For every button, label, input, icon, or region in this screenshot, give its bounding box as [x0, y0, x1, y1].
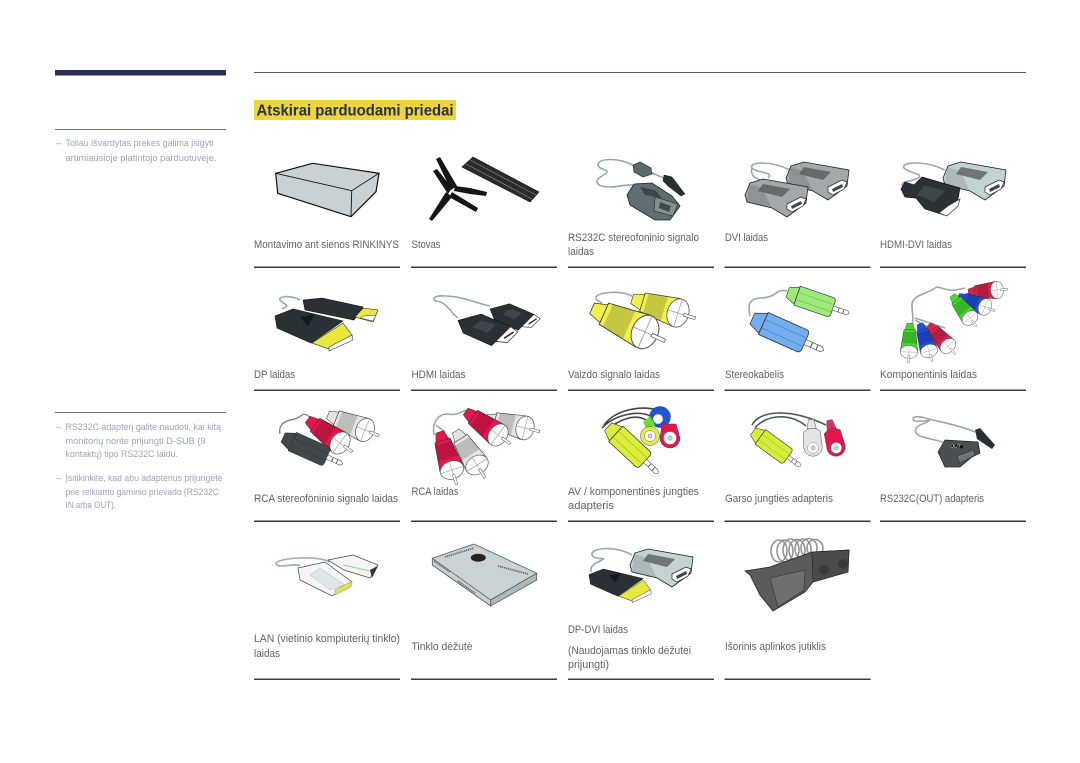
panel: HDMI-DVI cable — [880, 162, 1026, 268]
icon: DP cable connectors — [275, 297, 378, 351]
icon: RCA plugs — [428, 402, 542, 488]
panel: RS232C OUT adapter — [880, 417, 1026, 522]
note: connect adapters to correct port: IN arba OUT). — [66, 500, 116, 511]
label: adapteris — [568, 500, 615, 512]
note: availability at retailers: Toliau išvardytas prekes galima įsigyti — [66, 138, 214, 149]
label: Garso jungties adapteris — [725, 493, 834, 505]
label: (Naudojamas tinklo dėžutei — [568, 645, 691, 657]
label: Vaizdo signalo laidas — [568, 369, 661, 381]
note: availability at retailers — [55, 129, 226, 164]
panel: network box — [411, 544, 557, 680]
note: connect adapters to correct port: prie reikiamo gaminio prievado (RS232C — [66, 487, 219, 498]
label — [254, 633, 400, 660]
icon: wall mount box — [276, 163, 379, 217]
label: laidas — [254, 648, 281, 660]
note: RS232C adapter use: – — [56, 422, 62, 433]
note: RS232C adapter use — [55, 412, 226, 460]
panel: stereo cable — [724, 283, 870, 391]
label: HDMI laidas — [412, 369, 466, 381]
label — [568, 486, 700, 512]
note: connect adapters to correct port: – — [56, 473, 62, 484]
label: Tinklo dėžutė — [412, 641, 472, 653]
panel: DP cable — [254, 297, 400, 391]
icon: stereo jack plugs — [747, 283, 852, 361]
icon: HDMI and DVI connectors — [901, 162, 1006, 216]
label: RCA stereofoninio signalo laidas — [254, 493, 399, 505]
label: Komponentinis laidas — [880, 369, 978, 381]
panel: video signal cable — [568, 285, 714, 391]
icon: AV adapter plugs — [601, 406, 680, 481]
icon: component RCA plugs — [900, 281, 1008, 364]
label — [568, 232, 699, 258]
note: connect adapters to correct port — [56, 473, 222, 511]
label: laidas — [568, 246, 595, 258]
label: HDMI-DVI laidas — [880, 239, 953, 251]
label: Stereokabelis — [725, 369, 785, 381]
icon: RS232C OUT adapter: OUT — [950, 443, 961, 450]
label: DP-DVI laidas — [568, 624, 629, 636]
panel: stand — [411, 157, 557, 268]
panel: wall mount kit — [254, 163, 400, 268]
label: AV / komponentinės jungties — [568, 486, 700, 498]
panel: external ambient sensor — [724, 538, 870, 680]
panel: HDMI cable — [411, 296, 557, 391]
panel: RCA stereo cable — [254, 404, 400, 522]
panel: component cable — [880, 281, 1026, 391]
icon: external sensor with coiled cable — [745, 538, 849, 611]
label: DP laidas — [254, 369, 296, 381]
icon: two DVI connectors — [745, 162, 849, 217]
label: Stovas — [412, 239, 441, 251]
icon: LAN connectors — [276, 555, 378, 596]
heading: Atskirai parduodami priedai: Atskirai parduodami priedai — [256, 102, 454, 120]
sidebar header bar — [55, 70, 226, 76]
panel: RS232C stereo cable — [568, 160, 714, 268]
icon: DP and DVI connectors — [589, 549, 693, 603]
note: RS232C adapter use: RS232C adapterį galite naudoti, kai kitą — [66, 422, 222, 433]
note: connect adapters to correct port: Įsitikinkite, kad abu adapterius prijungėte — [66, 473, 222, 484]
note: RS232C adapter use: monitorių norite prijungti D-SUB (9 — [66, 436, 206, 447]
icon: RS232C stereo cable — [597, 160, 685, 220]
panel: RCA cable — [411, 402, 557, 522]
panel: AV component adapter — [568, 406, 714, 522]
icon: stand legs and rails — [429, 157, 539, 221]
note: RS232C adapter use: kontaktų) tipo RS232C laidu. — [66, 449, 178, 460]
icon: jack and RCA plugs — [279, 404, 383, 473]
label — [568, 624, 691, 671]
label: RS232C stereofoninio signalo — [568, 232, 699, 244]
panel: DVI cable — [724, 162, 870, 268]
label: LAN (vietinio kompiuterių tinklo) — [254, 633, 400, 645]
panel: audio adapter — [724, 413, 870, 522]
icon: RS232C OUT adapter — [913, 417, 995, 467]
panel: LAN cable — [254, 555, 400, 680]
label: DVI laidas — [725, 232, 769, 244]
note: availability at retailers: – — [56, 138, 62, 149]
icon: audio adapter plugs — [748, 413, 847, 473]
note: availability at retailers: artimiausioje platintojo parduotuvėje. — [66, 153, 216, 164]
label: RS232C(OUT) adapteris — [880, 493, 985, 505]
top header rule — [254, 72, 1026, 73]
icon: network box — [432, 544, 537, 606]
label: RCA laidas — [412, 486, 459, 498]
icon: HDMI cable connectors — [434, 296, 540, 346]
label: prijungti) — [568, 659, 609, 671]
label: Išorinis aplinkos jutiklis — [725, 641, 827, 653]
icon: yellow RCA video plugs — [585, 285, 699, 357]
label: Montavimo ant sienos RINKINYS — [254, 239, 399, 251]
panel: DP-DVI cable — [568, 549, 714, 680]
